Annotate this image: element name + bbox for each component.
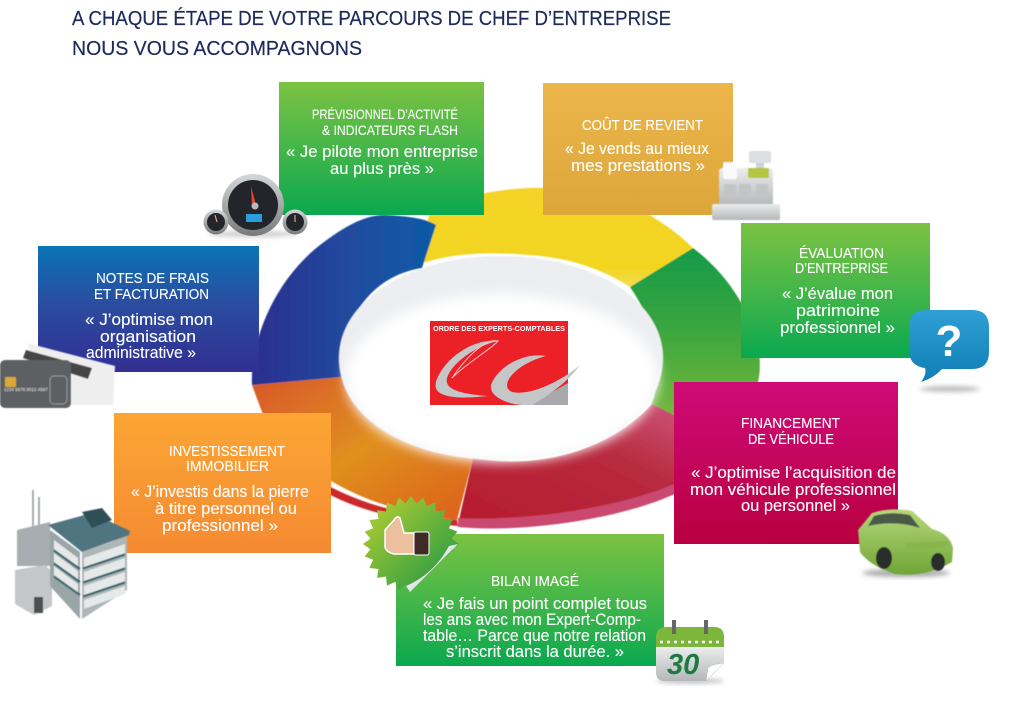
icon: gauges [204, 174, 308, 237]
panel: notes de frais: organisation [100, 327, 196, 346]
icon: credit cards [0, 343, 115, 408]
panel: bilan imagé: table… Parce que notre relation [423, 626, 646, 645]
icon: calendar [656, 620, 724, 684]
ring rim: red [458, 476, 690, 529]
panel: prévisionnel d'activité: « Je pilote mon entreprise [286, 142, 478, 161]
ring segment: orange [252, 377, 473, 520]
icon: thumbs-up badge [363, 496, 459, 592]
panel: bilan imagé: BILAN IMAGÉ [491, 573, 579, 590]
panel: coût de revient: COÛT DE REVIENT [582, 117, 703, 134]
panel: investissement immobilier [114, 413, 331, 553]
panel: prévisionnel d'activité [279, 82, 484, 215]
ring segment: yellow [415, 188, 693, 287]
icon: office building [15, 490, 130, 619]
panel: bilan imagé: « Je fais un point complet tous [423, 594, 647, 613]
panel: financement de véhicule: « J’optimise l’acquisition de [691, 463, 896, 482]
title: NOUS VOUS ACCOMPAGNONS [72, 37, 362, 60]
icon: question bubble: ? [936, 317, 962, 366]
panel: évaluation d'entreprise: D’ENTREPRISE [795, 261, 888, 277]
panel: notes de frais: NOTES DE FRAIS [96, 271, 209, 287]
panel: financement de véhicule: mon véhicule professionnel [690, 480, 896, 499]
panel: prévisionnel d'activité: PRÉVISIONNEL D’ACTIVITÉ [312, 107, 458, 122]
title [72, 7, 671, 60]
panel: bilan imagé: les ans avec mon Expert-Comp- [423, 610, 641, 629]
icon: calendar: 30 [667, 649, 699, 681]
panel: investissement immobilier: à titre personnel ou [155, 499, 297, 518]
panel: notes de frais: « J’optimise mon [85, 310, 213, 329]
panel: financement de véhicule: FINANCEMENT [741, 416, 840, 432]
panel: bilan imagé: s’inscrit dans la durée. » [446, 642, 624, 661]
ring segment: green [630, 248, 760, 425]
panel: prévisionnel d'activité: & INDICATEURS FLASH [322, 123, 458, 138]
panel: coût de revient: mes prestations » [571, 156, 705, 175]
panel: évaluation d'entreprise: ÉVALUATION [799, 245, 884, 262]
panel: investissement immobilier: « J’investis dans la pierre [131, 482, 309, 501]
panel: prévisionnel d'activité: au plus près » [330, 159, 434, 178]
panel: financement de véhicule [674, 382, 898, 544]
logo: ordre des experts-comptables [430, 321, 580, 405]
panel: notes de frais: administrative » [86, 343, 196, 362]
panel: financement de véhicule: ou personnel » [741, 496, 850, 515]
logo: ordre des experts-comptables: ORDRE DES EXPERTS-COMPTABLES [433, 326, 565, 333]
icon: green car [858, 509, 953, 577]
centre hole [339, 256, 663, 462]
panel: investissement immobilier: INVESTISSEMENT [169, 444, 285, 460]
panel: notes de frais: ET FACTURATION [94, 287, 209, 303]
icon: credit cards: 1234 5678 9012 4567 [4, 387, 48, 392]
ring segment: blue [252, 215, 436, 385]
panel: financement de véhicule: DE VÉHICULE [748, 431, 834, 448]
panel: évaluation d'entreprise [741, 223, 930, 358]
panel: notes de frais [38, 246, 259, 372]
panel: investissement immobilier: professionnel » [162, 516, 278, 535]
ring rim: orange [325, 484, 458, 526]
ring chart [252, 188, 760, 529]
panel: coût de revient [543, 83, 733, 215]
panel: investissement immobilier: IMMOBILIER [186, 459, 269, 475]
ring segment: red [458, 404, 700, 525]
panel: coût de revient: « Je vends au mieux [565, 139, 709, 158]
panel: évaluation d'entreprise: patrimoine [796, 301, 880, 320]
panel: bilan imagé [396, 534, 664, 666]
panel: évaluation d'entreprise: professionnel » [780, 318, 895, 337]
icon: cash register [712, 151, 780, 220]
icon: question bubble [909, 310, 989, 392]
title: A CHAQUE ÉTAPE DE VOTRE PARCOURS DE CHEF D’ENTREPRISE [72, 7, 671, 30]
panel: évaluation d'entreprise: « J’évalue mon [782, 284, 893, 303]
